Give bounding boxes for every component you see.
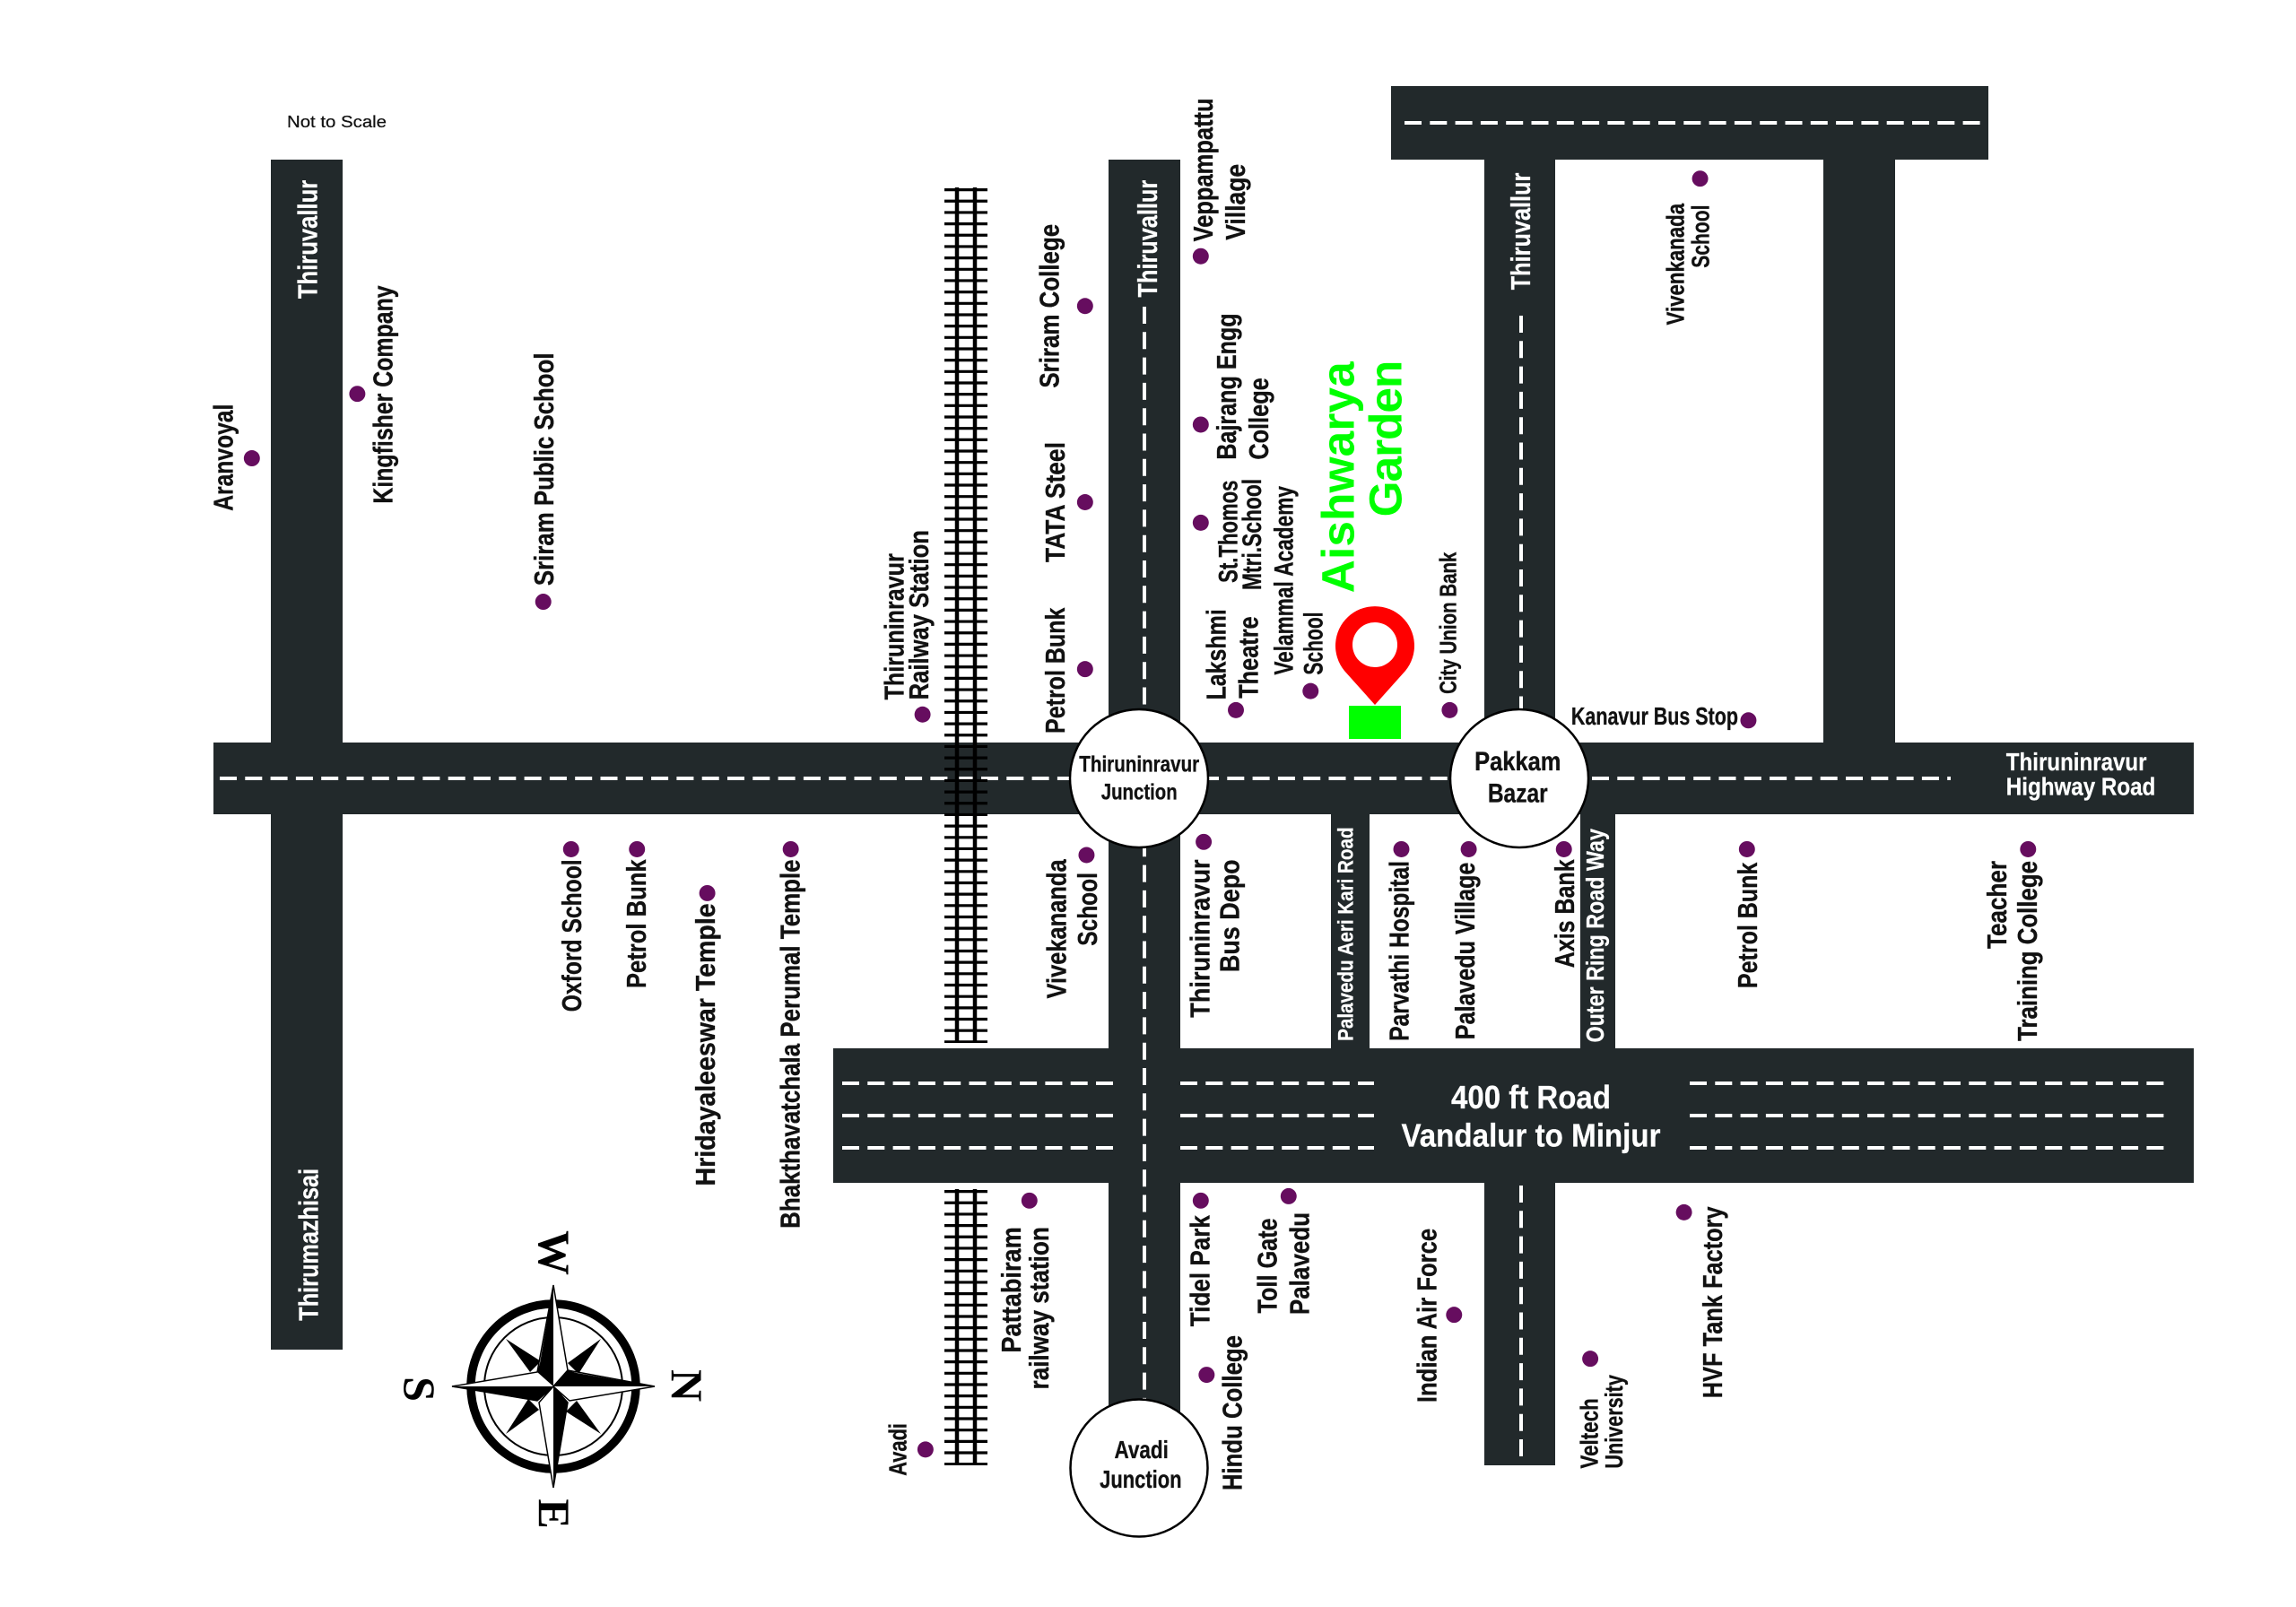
landmark labels north of highway — [210, 98, 1738, 734]
project name — [1311, 360, 1411, 593]
landmark labels south of 400 ft road: Toll Gate — [1254, 1218, 1283, 1314]
road labels: Palavedu Aeri Kari Road — [1335, 827, 1359, 1041]
landmark labels north of highway: Kingfisher Company — [370, 285, 399, 504]
map labels — [210, 98, 2155, 1493]
landmark labels south of highway: Palavedu Village — [1451, 863, 1481, 1039]
project name: Garden — [1359, 360, 1411, 517]
landmark labels north of highway: Mtri.School — [1238, 479, 1267, 590]
landmark labels south of 400 ft road: Tidel Park — [1187, 1215, 1216, 1326]
landmark labels south of 400 ft road: Palavedu — [1286, 1212, 1316, 1315]
compass letters: W — [529, 1230, 579, 1275]
landmark labels north of highway: Sriram College — [1035, 224, 1065, 388]
compass rose — [452, 1285, 655, 1488]
compass letters — [395, 1230, 712, 1529]
landmark labels north of highway: School — [1299, 612, 1328, 675]
landmark labels north of highway: School — [1686, 205, 1714, 268]
landmark labels south of 400 ft road: Avadi — [884, 1423, 912, 1476]
road labels: Thiruvallur — [1134, 180, 1163, 297]
landmark labels south of highway: Training College — [2013, 861, 2043, 1041]
landmark labels north of highway: College — [1245, 378, 1274, 460]
road labels: Vandalur to Minjur — [1401, 1116, 1661, 1153]
road: Outer Ring Road Way — [1580, 807, 1615, 1058]
landmark labels north of highway: Veppampattu — [1189, 98, 1219, 241]
landmark labels south of 400 ft road: University — [1600, 1375, 1628, 1469]
junction circles — [1070, 709, 1588, 1537]
road labels: Outer Ring Road Way — [1581, 829, 1609, 1042]
road labels: Highway Road — [2006, 773, 2155, 801]
landmark labels north of highway: TATA Steel — [1041, 442, 1071, 562]
road labels: Thiruninravur — [2006, 748, 2147, 776]
landmark labels south of highway: Bhakthavatchala Perumal Temple — [776, 859, 805, 1229]
landmark labels south of highway: Thiruninravur — [1187, 859, 1216, 1018]
project name: Aishwarya — [1311, 361, 1363, 593]
junction labels — [1079, 747, 1561, 1493]
landmark labels south of highway: Bus Depo — [1215, 859, 1245, 972]
road: Pakkam north — [1484, 160, 1555, 751]
junction labels: Junction — [1100, 1465, 1182, 1493]
landmark labels south of highway: Axis Bank — [1551, 859, 1580, 968]
icon: red location pin — [1335, 606, 1414, 705]
road labels: Thirumazhisai — [294, 1168, 324, 1321]
landmark labels south of highway: Petrol Bunk — [622, 859, 652, 988]
road: Palavedu Aeri Kari Road — [1331, 807, 1370, 1058]
compass letters: E — [529, 1498, 579, 1529]
landmark labels south of highway: School — [1074, 873, 1103, 946]
road: left Thiruvallur to Thirumazhisai — [271, 160, 343, 1350]
junction labels: Bazar — [1488, 779, 1548, 809]
landmark labels south of 400 ft road: Hindu College — [1219, 1335, 1248, 1490]
road labels — [293, 172, 2155, 1321]
road: Thiruninravur Highway — [213, 743, 2194, 814]
site marker: green plot — [1349, 706, 1401, 739]
landmark labels south of 400 ft road: railway station — [1025, 1227, 1055, 1389]
landmark labels south of highway: Teacher — [1983, 861, 2013, 949]
road: Thiruvallur to Avadi — [1109, 160, 1180, 1469]
compass letters: N — [662, 1369, 712, 1402]
landmark labels south of 400 ft road: Indian Air Force — [1413, 1229, 1443, 1403]
road centre dashes — [220, 123, 2164, 1462]
landmark labels north of highway: City Union Bank — [1435, 552, 1462, 694]
road network — [213, 86, 2194, 1469]
junction labels: Thiruninravur — [1079, 751, 1199, 777]
compass letters: S — [395, 1377, 445, 1402]
landmark labels north of highway: Village — [1222, 164, 1251, 240]
road: Pakkam south — [1484, 1166, 1555, 1465]
landmark labels north of highway: Bajrang Engg — [1213, 313, 1242, 460]
road: top — [1391, 86, 1988, 160]
landmark labels south of highway: Petrol Bunk — [1734, 862, 1763, 988]
railway line north — [957, 187, 975, 1043]
landmark labels north of highway: Kanavur Bus Stop — [1571, 702, 1738, 730]
junction labels: Avadi — [1114, 1436, 1169, 1464]
landmark dots — [244, 170, 2036, 1457]
landmark labels north of highway: Sriram Public School — [530, 352, 560, 586]
road labels: 400 ft Road — [1451, 1079, 1611, 1116]
landmark labels south of highway — [558, 859, 2043, 1229]
landmark labels north of highway: St.Thomos — [1214, 481, 1244, 583]
landmark labels north of highway: Theatre — [1234, 616, 1264, 699]
junction labels: Junction — [1101, 779, 1178, 804]
landmark labels south of highway: Parvathi Hospital — [1386, 861, 1415, 1041]
road: 400 ft Road — [833, 1048, 2194, 1183]
landmark labels south of 400 ft road — [884, 1206, 1728, 1490]
landmark labels north of highway: Aranvoyal — [210, 404, 239, 511]
landmark labels north of highway: Lakshmi — [1203, 609, 1232, 699]
landmark labels south of 400 ft road: Pattabiram — [997, 1227, 1027, 1353]
landmark labels north of highway: Railway Station — [905, 530, 935, 699]
landmark labels north of highway: Velammal Academy — [1270, 486, 1300, 675]
railway line south — [957, 1189, 975, 1465]
road labels: Thiruvallur — [1507, 172, 1536, 290]
road: east connector — [1823, 160, 1895, 751]
landmark labels south of highway: Vivekananda — [1043, 859, 1073, 999]
landmark labels north of highway: Petrol Bunk — [1041, 607, 1071, 734]
road labels: Thiruvallur — [293, 180, 323, 299]
junction labels: Pakkam — [1474, 747, 1561, 777]
landmark labels south of highway: Hridayaleeswar Temple — [691, 903, 721, 1186]
landmark labels north of highway: Thiruninravur — [880, 553, 909, 699]
landmark labels south of 400 ft road: Veltech — [1575, 1398, 1603, 1469]
landmark labels south of highway: Oxford School — [558, 859, 587, 1012]
note: not to scale: Not to Scale — [287, 112, 387, 131]
landmark labels south of 400 ft road: HVF Tank Factory — [1699, 1206, 1728, 1398]
landmark labels north of highway: Vivenkanada — [1662, 203, 1690, 325]
